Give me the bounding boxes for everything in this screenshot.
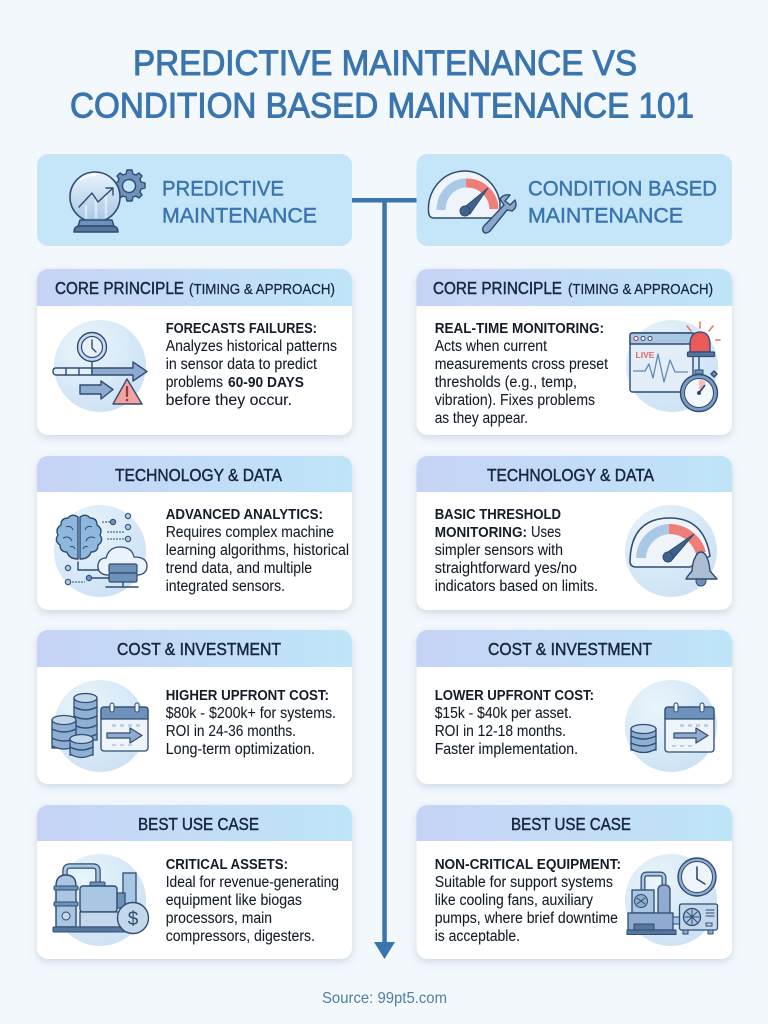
text block: ROI in 24-36 months. — [166, 723, 296, 740]
text block: compressors, digesters. — [166, 928, 315, 945]
heading: COST & INVESTMENT — [117, 639, 281, 659]
text block: processors, main — [166, 910, 272, 927]
heading: BEST USE CASE — [511, 814, 631, 834]
text block: pumps, where brief downtime — [435, 910, 618, 927]
heading: (TIMING & APPROACH) — [568, 282, 713, 298]
text block: simpler sensors with — [435, 542, 563, 559]
icon: live monitor with siren and stopwatch — [626, 320, 720, 412]
text block — [435, 320, 609, 427]
text block: measurements cross preset — [435, 356, 609, 373]
text block — [435, 506, 598, 595]
heading: condition based maintenance: CONDITION BASED — [528, 176, 717, 200]
panel: condition based cost and investment — [416, 630, 732, 784]
text block: FORECASTS FAILURES: — [166, 320, 317, 337]
text block: REAL-TIME MONITORING: — [435, 320, 604, 337]
panel: predictive technology and data — [37, 456, 352, 610]
text block: learning algorithms, historical — [166, 542, 349, 559]
text block: before they occur. — [166, 392, 292, 409]
icon: gauge with wrench — [428, 171, 516, 233]
text block: Uses — [531, 524, 561, 541]
panel: predictive best use case — [37, 805, 352, 959]
heading: CORE PRINCIPLE — [433, 278, 562, 298]
text block: indicators based on limits. — [435, 578, 598, 595]
text block: NON-CRITICAL EQUIPMENT: — [435, 856, 621, 873]
title: PREDICTIVE MAINTENANCE VS — [133, 44, 637, 83]
text block: in sensor data to predict — [166, 356, 318, 373]
text block: Acts when current — [435, 338, 548, 355]
icon: gauge with bell — [625, 505, 717, 597]
text block: Ideal for revenue-generating — [166, 874, 339, 891]
text block: 60-90 DAYS — [228, 374, 304, 391]
text block: like cooling fans, auxiliary — [435, 892, 593, 909]
text block: LOWER UPFRONT COST: — [435, 687, 594, 704]
heading: CORE PRINCIPLE — [55, 278, 184, 298]
text block: integrated sensors. — [166, 578, 285, 595]
heading: predictive maintenance: MAINTENANCE — [162, 204, 317, 228]
text block — [435, 687, 594, 758]
heading: COST & INVESTMENT — [488, 639, 652, 659]
icon: coin stack and calendar — [625, 680, 717, 772]
text block: trend data, and multiple — [166, 560, 312, 577]
text block — [435, 856, 621, 945]
text block: Analyzes historical patterns — [166, 338, 337, 355]
icon: crystal ball with gear — [70, 170, 145, 232]
icon: live monitor with siren and stopwatch: LIVE — [636, 350, 655, 360]
panel: predictive cost and investment — [37, 630, 352, 784]
heading: condition based maintenance: MAINTENANCE — [528, 204, 683, 228]
text block — [166, 856, 339, 945]
text block: straightforward yes/no — [435, 560, 577, 577]
text block: as they appear. — [435, 410, 528, 427]
panel: condition based core principle — [416, 269, 732, 435]
title — [70, 44, 694, 126]
heading: TECHNOLOGY & DATA — [487, 465, 654, 485]
text block — [166, 320, 337, 409]
heading: predictive maintenance — [162, 176, 317, 228]
text block: vibration). Fixes problems — [435, 392, 595, 409]
title: CONDITION BASED MAINTENANCE 101 — [70, 86, 694, 126]
heading: BEST USE CASE — [138, 814, 259, 834]
text block: $80k - $200k+ for systems. — [166, 705, 336, 722]
heading: TECHNOLOGY & DATA — [115, 465, 282, 485]
text block: CRITICAL ASSETS: — [166, 856, 288, 873]
icon: machinery with dollar coin: $ — [128, 909, 139, 930]
icon: timeline with clock and warning — [53, 320, 147, 412]
text block: BASIC THRESHOLD — [435, 506, 561, 523]
panel: predictive maintenance header — [37, 154, 352, 246]
text block: Long-term optimization. — [166, 741, 315, 758]
text block: is acceptable. — [435, 928, 520, 945]
panel: predictive core principle — [37, 269, 352, 435]
text block: MONITORING: — [435, 524, 527, 541]
panel: condition based technology and data — [416, 456, 732, 610]
text block — [166, 687, 336, 758]
text block: Suitable for support systems — [435, 874, 613, 891]
icon: coin stacks and calendar — [52, 680, 148, 772]
heading: predictive maintenance: PREDICTIVE — [162, 176, 284, 200]
central connector arrow — [352, 198, 417, 959]
text block: $15k - $40k per asset. — [435, 705, 572, 722]
text block: HIGHER UPFRONT COST: — [166, 687, 329, 704]
panel: condition based maintenance header — [416, 154, 732, 246]
heading: condition based maintenance — [528, 176, 717, 228]
panel: condition based best use case — [416, 805, 732, 959]
source: Source: 99pt5.com — [322, 990, 447, 1007]
icon: support equipment with clock — [625, 854, 718, 946]
text block: ADVANCED ANALYTICS: — [166, 506, 323, 523]
text block: problems — [166, 374, 223, 391]
text block: Faster implementation. — [435, 741, 578, 758]
text block: equipment like biogas — [166, 892, 302, 909]
text block: Requires complex machine — [166, 524, 334, 541]
icon: brain and cloud server — [54, 505, 147, 597]
text block — [166, 506, 349, 595]
text block: ROI in 12-18 months. — [435, 723, 566, 740]
heading — [55, 278, 335, 298]
heading — [433, 278, 713, 298]
icon: machinery with dollar coin — [53, 854, 148, 946]
text block: thresholds (e.g., temp, — [435, 374, 577, 391]
heading: (TIMING & APPROACH) — [189, 282, 335, 298]
